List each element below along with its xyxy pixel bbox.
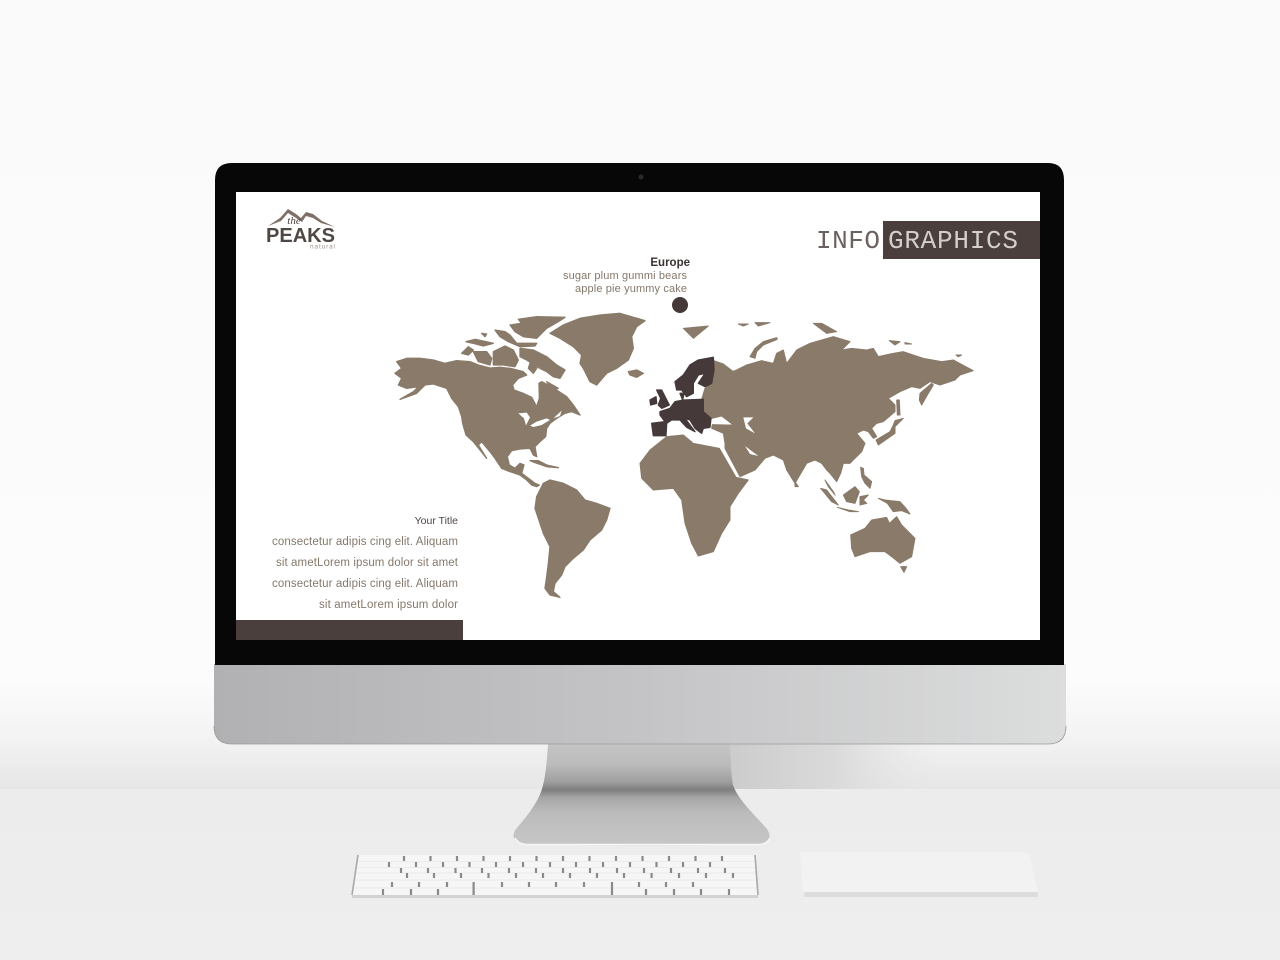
Canadian Arctic islands <box>462 317 565 389</box>
callout line 2: apple pie yummy cake <box>575 283 687 295</box>
Eurasia <box>702 337 973 483</box>
highlighted Europe <box>650 357 714 436</box>
webcam <box>638 174 644 180</box>
Greenland <box>550 313 645 385</box>
keyboard side edges <box>352 855 758 895</box>
Caribbean islands <box>530 461 558 468</box>
Great Lakes <box>518 411 562 427</box>
keyboard row lines <box>354 862 757 888</box>
keyboard body <box>352 855 758 895</box>
logo tagline: natural <box>310 244 336 250</box>
keyboard key gaps <box>383 856 733 895</box>
Iceland <box>628 370 643 377</box>
Arctic islands <box>683 323 962 358</box>
text block <box>272 515 459 611</box>
callout line 1: sugar plum gummi bears <box>563 270 688 282</box>
monitor stand <box>514 744 770 846</box>
black bezel <box>215 163 1064 665</box>
body line 3: consectetur adipis cing elit. Aliquam <box>272 578 458 590</box>
Continental Europe <box>652 399 711 436</box>
Kamchatka-side island <box>919 383 933 405</box>
Southeast Asian islands <box>795 467 910 514</box>
North America <box>395 358 580 487</box>
title word INFO: INFO <box>816 226 880 256</box>
title bar <box>883 221 1040 259</box>
logo wordmark: PEAKS <box>266 225 335 247</box>
body line 1: consectetur adipis cing elit. Aliquam <box>272 536 458 548</box>
trackpad <box>800 852 1038 897</box>
callout marker dot <box>672 297 688 313</box>
aluminium chin <box>214 664 1066 744</box>
stand edge highlight <box>515 838 770 844</box>
desk surface <box>0 789 1280 960</box>
monitor shadow on wall <box>730 744 940 789</box>
map: Americas and Greenland <box>395 313 645 597</box>
trackpad surface <box>800 852 1038 892</box>
Sakhalin and Japan <box>876 400 903 445</box>
Denmark <box>680 393 684 400</box>
bottom bar <box>236 620 463 640</box>
screen <box>236 192 1040 640</box>
body line 2: sit ametLorem ipsum dolor sit amet <box>276 557 459 569</box>
map: Old World <box>640 323 973 572</box>
callout: Europe <box>563 257 690 313</box>
keyboard front edge <box>352 895 758 898</box>
British Isles <box>650 390 669 408</box>
world map <box>395 313 973 597</box>
chin lower rim <box>214 726 1066 744</box>
text block heading: Your Title <box>415 515 458 527</box>
body line 4: sit ametLorem ipsum dolor <box>319 599 458 611</box>
logo script word: the <box>287 215 301 227</box>
trackpad front edge <box>804 892 1038 897</box>
keyboard <box>352 855 758 898</box>
Australia <box>851 517 915 563</box>
Caspian Sea <box>743 417 755 433</box>
title <box>816 221 1040 259</box>
title word GRAPHICS: GRAPHICS <box>888 226 1018 256</box>
Tasmania <box>901 567 907 572</box>
Persian Gulf <box>745 446 758 456</box>
callout heading: Europe <box>650 257 690 269</box>
mountain mark <box>268 209 335 227</box>
Scandinavia <box>675 357 714 397</box>
logo <box>266 209 336 250</box>
Africa <box>640 435 748 556</box>
South America <box>535 480 610 597</box>
monitor <box>214 163 1066 846</box>
